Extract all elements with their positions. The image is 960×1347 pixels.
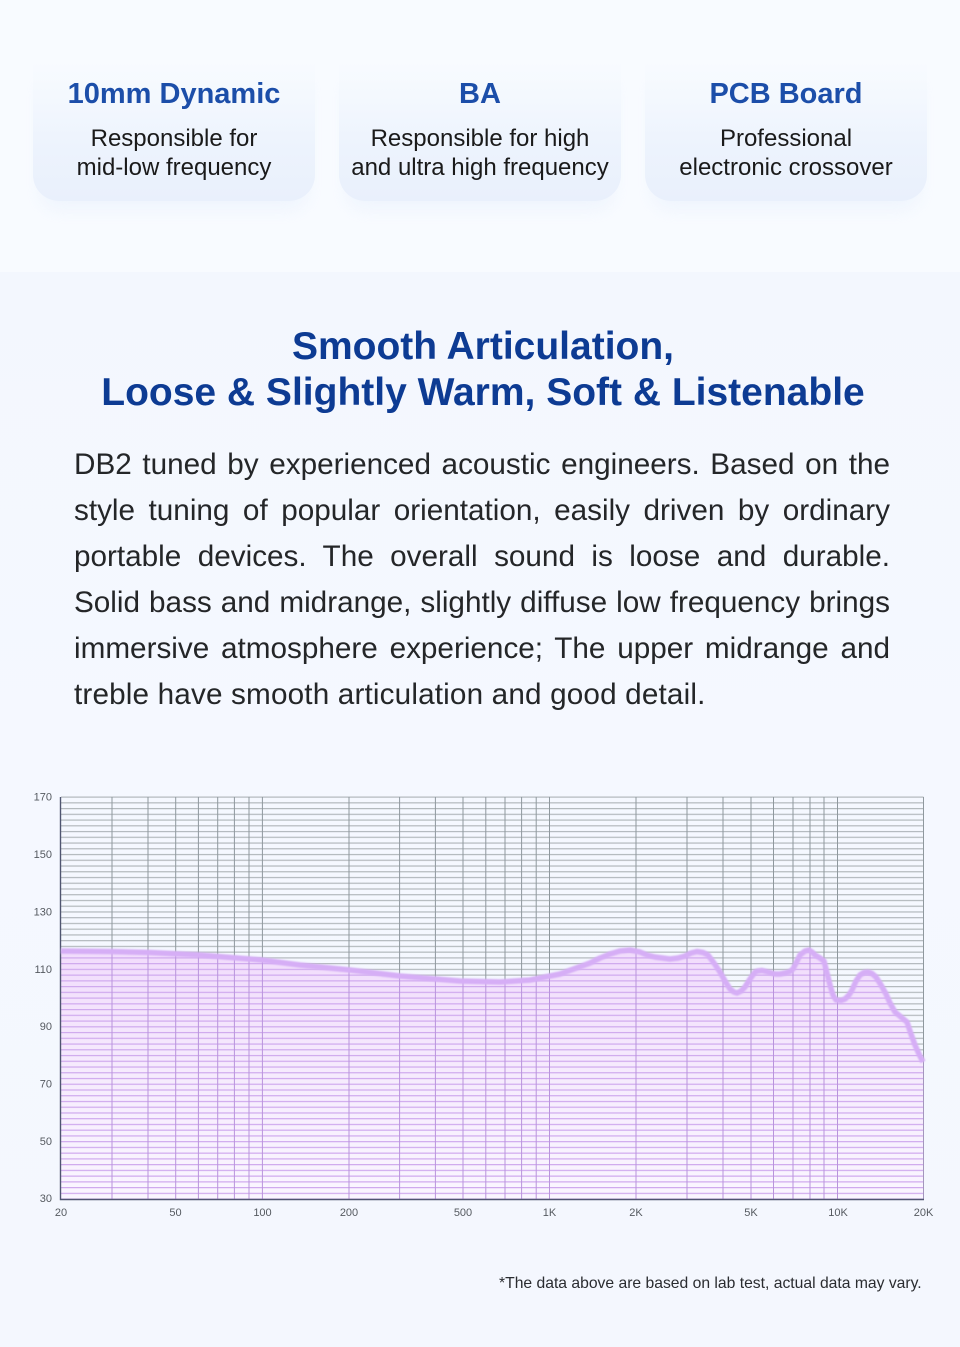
text block: description: Solid bass and midrange, slightly diffuse low frequency brings (74, 586, 890, 618)
x axis labels: 5K (744, 1207, 758, 1219)
card: 10mm Dynamic: 10mm Dynamic (68, 78, 280, 110)
y axis labels: 70 (40, 1078, 52, 1090)
text block: description: portable devices. The overall sound is loose and durable. (74, 540, 890, 572)
x axis labels: 2K (629, 1207, 643, 1219)
x axis labels: 200 (340, 1207, 358, 1219)
x axis labels: 10K (828, 1207, 848, 1219)
x axis labels: 500 (454, 1207, 472, 1219)
chart grid (61, 796, 924, 1200)
panel: driver cards (33, 78, 927, 201)
text block: description (74, 448, 890, 710)
y axis labels: 30 (40, 1193, 52, 1205)
heading: Loose & Slightly Warm, Soft & Listenable (101, 370, 865, 414)
x axis labels: 1K (543, 1207, 557, 1219)
card: PCB Board: electronic crossover (679, 154, 893, 181)
x axis labels: 100 (253, 1207, 272, 1219)
response curve (61, 950, 923, 1062)
chart: frequency response (34, 792, 934, 1219)
x axis labels: 50 (169, 1207, 182, 1219)
y axis labels: 170 (34, 792, 52, 804)
text block: description: style tuning of popular orientation, easily driven by ordinary (74, 494, 890, 526)
y axis labels: 150 (34, 849, 52, 861)
heading (101, 324, 865, 414)
card: 10mm Dynamic (33, 60, 315, 201)
card: PCB Board: Professional (720, 125, 852, 152)
panel: lower background (0, 272, 960, 1347)
card: BA: Responsible for high (371, 125, 589, 152)
footnote: *The data above are based on lab test, actual data may vary. (499, 1275, 922, 1292)
y axis labels: 110 (34, 964, 52, 976)
x axis labels (55, 1207, 934, 1219)
area under curve (61, 940, 924, 1199)
card: BA: BA (459, 78, 501, 110)
y axis labels: 130 (34, 906, 52, 918)
heading: Smooth Articulation, (292, 324, 674, 368)
text block: description: immersive atmosphere experience; The upper midrange and (74, 632, 890, 664)
card: BA (339, 60, 621, 201)
text block: description: treble have smooth articulation and good detail. (74, 678, 706, 710)
y axis labels: 90 (40, 1021, 52, 1033)
x axis labels: 20 (55, 1207, 67, 1219)
axes (60, 797, 924, 1200)
x axis labels: 20K (914, 1207, 934, 1219)
card: PCB Board: PCB Board (709, 78, 863, 110)
text block: description: DB2 tuned by experienced acoustic engineers. Based on the (74, 448, 890, 480)
y axis labels: 50 (40, 1136, 52, 1148)
card: 10mm Dynamic: mid-low frequency (77, 154, 271, 181)
card: 10mm Dynamic: Responsible for (91, 125, 257, 152)
card: BA: and ultra high frequency (351, 154, 609, 181)
y axis labels (34, 792, 52, 1205)
card: PCB Board (645, 60, 927, 201)
